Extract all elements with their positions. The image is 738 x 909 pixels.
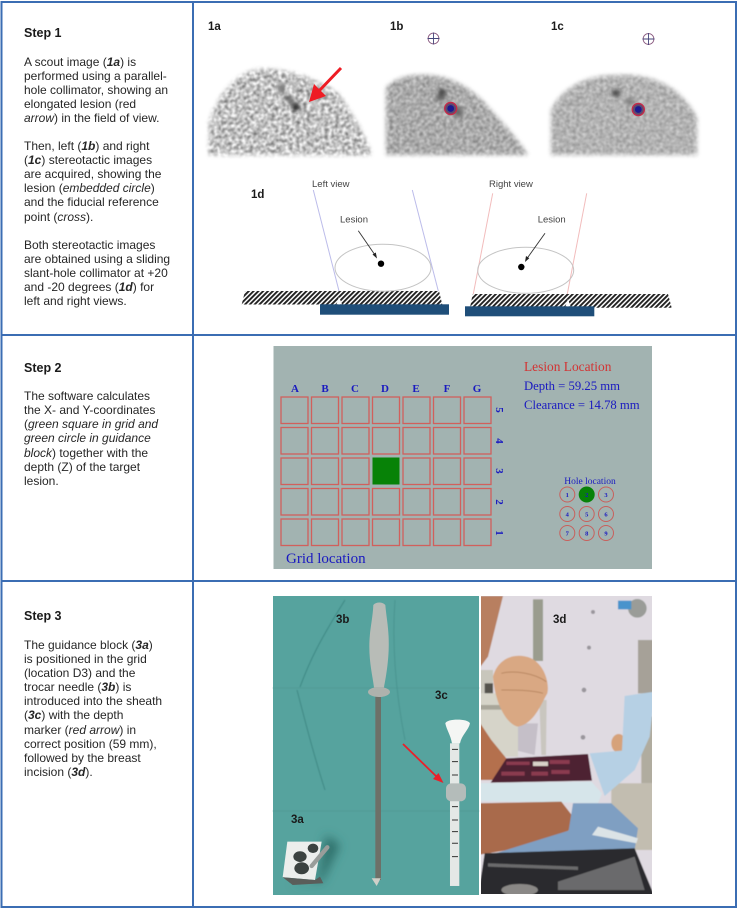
- text block: software calculates: green circle in guidance: [24, 431, 151, 445]
- text block: guidance block: correct position (59 mm),: [24, 737, 157, 751]
- grid highlights: [501, 760, 570, 776]
- green hole 2: [579, 486, 595, 502]
- row labels: 5: [493, 407, 505, 413]
- text block: collimator: slant-hole collimator at +20: [24, 266, 168, 280]
- column labels: A: [291, 383, 299, 395]
- panel: scintigraphy image 1b: [386, 21, 527, 155]
- left view diagram: [242, 179, 449, 315]
- depth marker: [446, 783, 466, 801]
- needle collar: [368, 687, 390, 697]
- text block: scout image: arrow) in the field of view.: [24, 111, 159, 125]
- right lesion arrow: [525, 233, 545, 262]
- lesion uptake: [278, 83, 300, 111]
- lesion location readout: Lesion Location: [524, 359, 612, 374]
- text block: stereotactic images: and the fiducial reference: [24, 195, 159, 209]
- lesion location readout: Depth = 59.25 mm: [524, 379, 620, 393]
- block base: [283, 877, 323, 885]
- equipment: [618, 599, 655, 783]
- green drape background: [273, 596, 479, 895]
- guidance block: [283, 842, 327, 885]
- hole numbers: [566, 492, 608, 538]
- icon: red arrow: [403, 744, 444, 783]
- lower arm: [478, 802, 573, 855]
- left lesion dot: [378, 260, 384, 267]
- icon: red arrow: [309, 68, 341, 102]
- text block: stereotactic images: point (cross).: [24, 210, 93, 224]
- lower blue drape: [497, 802, 638, 854]
- label 3c: 3c: [435, 690, 448, 702]
- drape fold: [592, 827, 638, 843]
- needle tip: [372, 878, 381, 886]
- text block: software calculates: the X- and Y-coordinates: [24, 403, 155, 417]
- panel: scintigraphy image 1a: [208, 21, 371, 155]
- right lesion dot: [518, 264, 524, 270]
- guidance block in grid: [533, 762, 548, 766]
- icon: fiducial cross: [642, 33, 654, 45]
- panel: guidance software screen: [274, 346, 652, 569]
- row labels: 4: [493, 438, 505, 444]
- left hatched table: [242, 291, 442, 304]
- sheath funnel: [445, 720, 470, 743]
- needle top: [533, 599, 543, 661]
- hole numbers: 9: [604, 530, 608, 538]
- guidance block holes: [560, 477, 616, 540]
- hole numbers: 7: [566, 530, 570, 538]
- text block: guidance block: is positioned in the grid: [24, 652, 147, 666]
- hole numbers: 8: [585, 530, 589, 538]
- column labels: C: [351, 383, 359, 395]
- panel: step 3 text: [24, 609, 162, 779]
- hole numbers: 3: [604, 492, 608, 499]
- text block: stereotactic images: lesion (embedded circle): [24, 181, 155, 195]
- white coat: [478, 590, 658, 897]
- text block: guidance block: followed by the breast: [24, 751, 141, 765]
- heading: step 1: Step 1: [24, 26, 62, 40]
- text block: guidance block: incision (3d).: [24, 765, 93, 779]
- text block: software calculates: (green square in grid and: [24, 417, 158, 431]
- hole numbers: 6: [604, 512, 608, 518]
- sheath tube: [450, 743, 459, 886]
- column labels: G: [473, 383, 482, 395]
- text block: guidance block: (3c) with the depth: [24, 708, 123, 722]
- label: grid location: Grid location: [286, 551, 366, 567]
- lesion uptake: [435, 88, 463, 117]
- block handle: [312, 847, 327, 866]
- screen background: [274, 346, 652, 569]
- column labels: D: [381, 383, 389, 395]
- forearm: [481, 724, 507, 781]
- text block: collimator: left and right views.: [24, 294, 127, 308]
- block holes: [293, 844, 318, 874]
- icon: fiducial cross: [428, 32, 440, 44]
- photo contents: [478, 590, 658, 897]
- column labels: E: [412, 383, 420, 395]
- hole numbers: 2: [585, 492, 588, 499]
- patient hand: [610, 734, 624, 752]
- left breast outline: [335, 244, 431, 291]
- image: left stereotactic scan: [386, 75, 527, 155]
- label 1a: 1a: [208, 21, 221, 33]
- block shadow: [290, 835, 340, 885]
- label 1d: 1d: [251, 189, 264, 201]
- left view lines: [313, 190, 438, 291]
- panel: instruments photo: [273, 596, 479, 895]
- needle lower: [539, 700, 547, 755]
- label: lesion: Lesion: [538, 214, 566, 226]
- label: left view: Left view: [312, 179, 350, 190]
- text block: stereotactic images: (1c) stereotactic images: [24, 153, 152, 167]
- white drape band: [478, 782, 602, 803]
- right hatched table: [470, 294, 672, 308]
- row labels: 1: [493, 530, 505, 536]
- shelves: [478, 670, 518, 757]
- panel: collimator diagram 1d: [242, 179, 672, 316]
- row labels: 2: [493, 499, 505, 505]
- text block: collimator: and -20 degrees (1d) for: [24, 280, 154, 294]
- sheath: [445, 720, 470, 886]
- column labels: B: [321, 383, 329, 395]
- needle shaft: [375, 693, 381, 880]
- text block: guidance block: marker (red arrow) in: [24, 723, 136, 737]
- label: hole location: Hole location: [564, 477, 616, 487]
- text block: guidance block: (location D3) and the: [24, 666, 136, 680]
- left notch: [336, 297, 342, 304]
- right collimator bar: [465, 306, 594, 316]
- right notch: [566, 299, 570, 306]
- fingers shadow: [501, 672, 546, 693]
- text block: stereotactic images: Then, left (1b) and right: [24, 139, 149, 153]
- scale ticks: [452, 749, 458, 857]
- drape folds: [273, 600, 479, 811]
- text block: scout image: performed using a parallel-: [24, 69, 167, 83]
- image: parallel-hole scan: [209, 69, 371, 155]
- label 3a: 3a: [291, 814, 304, 826]
- text block: software calculates: depth (Z) of the target: [24, 460, 141, 474]
- right view diagram: [465, 179, 672, 316]
- text block: software calculates: block) together with the: [24, 446, 148, 460]
- label: lesion: Lesion: [340, 214, 368, 226]
- icon: embedded circle: [445, 102, 457, 114]
- column labels: F: [444, 383, 451, 395]
- panel: step 1 text: [24, 26, 170, 308]
- hole circles: [560, 487, 614, 540]
- hole numbers: 4: [566, 512, 570, 518]
- icon: embedded circle: [632, 104, 644, 116]
- row labels: 3: [493, 468, 505, 474]
- hole numbers: 5: [585, 512, 589, 518]
- panel: incision photo: [478, 590, 658, 897]
- heading: step 2: Step 2: [24, 361, 62, 375]
- label 1b: 1b: [390, 21, 403, 33]
- hand: [493, 656, 548, 727]
- label 3b: 3b: [336, 614, 349, 626]
- coat shadow: [518, 723, 538, 755]
- text block: software calculates: lesion.: [24, 474, 59, 488]
- text block: scout image: A scout image (1a) is: [24, 55, 136, 69]
- left collimator bar: [320, 304, 449, 315]
- dark base: [478, 848, 655, 897]
- hole numbers: 1: [566, 492, 569, 499]
- base highlights: [488, 857, 645, 896]
- text block: guidance block: The guidance block (3a): [24, 638, 153, 652]
- right view lines: [473, 193, 587, 294]
- text block: software calculates: The software calculates: [24, 389, 150, 403]
- text block: scout image: elongated lesion (red: [24, 97, 136, 111]
- lesion location readout: [524, 359, 640, 412]
- left lesion arrow: [358, 231, 377, 258]
- lower backdrop: [611, 783, 652, 850]
- column labels: [291, 383, 482, 395]
- upper blue drape: [590, 692, 655, 796]
- label 3d: 3d: [553, 614, 566, 626]
- trocar needle: [368, 602, 390, 886]
- compression grid: [491, 754, 592, 783]
- right breast outline: [478, 247, 574, 293]
- label 1c: 1c: [551, 21, 564, 33]
- label: right view: Right view: [489, 179, 533, 190]
- coat buttons: [581, 610, 595, 740]
- text block: scout image: hole collimator, showing an: [24, 83, 168, 97]
- upper arm: [481, 596, 504, 667]
- lesion uptake: [612, 90, 636, 107]
- panel: step 2 text: [24, 361, 158, 488]
- row labels: [493, 407, 505, 536]
- needle handle: [369, 602, 389, 687]
- text block: collimator: Both stereotactic images: [24, 238, 155, 252]
- green square D3: [372, 458, 400, 484]
- heading: step 3: Step 3: [24, 609, 62, 623]
- block face: [283, 842, 322, 880]
- text block: collimator: are obtained using a sliding: [24, 252, 170, 266]
- grid of cells: [281, 397, 491, 546]
- text block: guidance block: introduced into the sheath: [24, 694, 162, 708]
- image: right stereotactic scan: [551, 75, 697, 155]
- text block: guidance block: trocar needle (3b) is: [24, 680, 131, 694]
- lesion location readout: Clearance = 14.78 mm: [524, 398, 640, 412]
- text block: stereotactic images: are acquired, showing the: [24, 167, 162, 181]
- panel: scintigraphy image 1c: [551, 21, 697, 155]
